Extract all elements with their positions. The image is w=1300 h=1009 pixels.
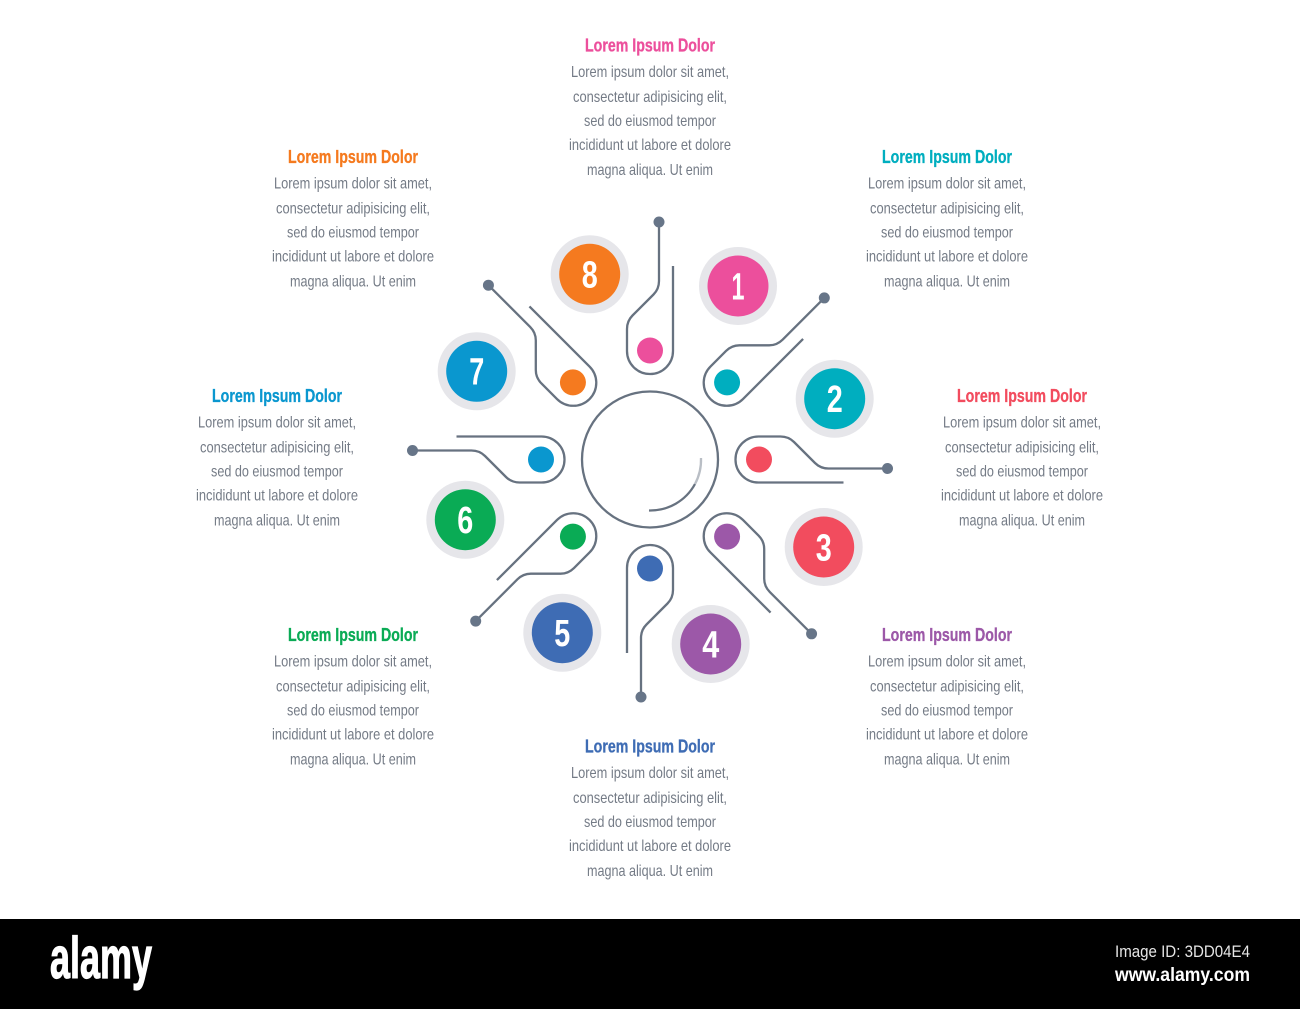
text block 8: orange, upper left: Lorem ipsum dolor sit amet, bbox=[274, 176, 432, 192]
text block 5: blue, bottom: magna aliqua. Ut enim bbox=[587, 863, 713, 880]
text block 8: orange, upper left: magna aliqua. Ut enim bbox=[290, 274, 416, 290]
text block 3: red, right: sed do eiusmod tempor bbox=[956, 464, 1089, 480]
text block 6: green, lower left: magna aliqua. Ut enim bbox=[290, 752, 416, 768]
text block 4: purple, lower right: Lorem Ipsum Dolor bbox=[882, 625, 1012, 645]
number badge 5: 5 bbox=[554, 613, 570, 655]
number badge 8: 8 bbox=[582, 254, 598, 296]
text block 3: red, right bbox=[941, 386, 1103, 530]
text block 1: pink, top: incididunt ut labore et dolore bbox=[569, 137, 731, 154]
image id: Image ID: 3DD04E4 bbox=[1115, 942, 1250, 961]
text block 1: pink, top bbox=[569, 36, 731, 179]
text block 5: blue, bottom: incididunt ut labore et dolore bbox=[569, 838, 731, 855]
number badge 4 bbox=[672, 605, 750, 683]
number badge 4: 4 bbox=[702, 624, 719, 666]
text block 2: teal, upper right: magna aliqua. Ut enim bbox=[884, 274, 1010, 290]
connector 5: blue bbox=[627, 545, 673, 702]
text block 1: pink, top: consectetur adipisicing elit, bbox=[573, 89, 727, 106]
text block 3: red, right: incididunt ut labore et dolore bbox=[941, 488, 1103, 504]
text block 6: green, lower left: Lorem Ipsum Dolor bbox=[288, 625, 418, 645]
text block 7: light blue, left: magna aliqua. Ut enim bbox=[214, 512, 340, 530]
number badge 2 bbox=[796, 360, 874, 438]
text block 1: pink, top: Lorem Ipsum Dolor bbox=[585, 36, 715, 56]
connector 6: green bbox=[462, 504, 606, 648]
text block 3: red, right: Lorem ipsum dolor sit amet, bbox=[943, 414, 1101, 432]
text block 3: red, right: Lorem Ipsum Dolor bbox=[957, 386, 1087, 406]
number badge 7 bbox=[438, 332, 516, 410]
text block 3: red, right: consectetur adipisicing elit, bbox=[945, 440, 1099, 456]
text block 2: teal, upper right: Lorem Ipsum Dolor bbox=[882, 147, 1012, 167]
text block 5: blue, bottom: consectetur adipisicing elit, bbox=[573, 790, 727, 807]
text block 2: teal, upper right bbox=[866, 147, 1028, 290]
text block 7: light blue, left bbox=[196, 386, 358, 530]
text block 6: green, lower left: Lorem ipsum dolor sit amet, bbox=[274, 654, 432, 670]
text block 7: light blue, left: incididunt ut labore et dolore bbox=[196, 488, 358, 504]
text block 8: orange, upper left bbox=[272, 147, 434, 290]
number badge 6 bbox=[426, 481, 504, 559]
text block 6: green, lower left: consectetur adipisicing elit, bbox=[276, 678, 430, 696]
number badge 7: 7 bbox=[469, 352, 484, 394]
text block 2: teal, upper right: consectetur adipisicing elit, bbox=[870, 200, 1024, 218]
text block 8: orange, upper left: consectetur adipisicing elit, bbox=[276, 200, 430, 218]
text block 6: green, lower left: incididunt ut labore et dolore bbox=[272, 726, 434, 744]
text block 4: purple, lower right bbox=[866, 625, 1028, 768]
number badge 1: 1 bbox=[732, 266, 744, 308]
text block 4: purple, lower right: magna aliqua. Ut enim bbox=[884, 752, 1010, 768]
text block 7: light blue, left: sed do eiusmod tempor bbox=[211, 464, 344, 480]
text block 4: purple, lower right: sed do eiusmod tempor bbox=[881, 702, 1014, 720]
text block 4: purple, lower right: Lorem ipsum dolor sit amet, bbox=[868, 654, 1026, 670]
text block 8: orange, upper left: sed do eiusmod tempor bbox=[287, 224, 420, 242]
website: www.alamy.com bbox=[1114, 965, 1250, 986]
text block 3: red, right: magna aliqua. Ut enim bbox=[959, 512, 1085, 530]
number badge 3: 3 bbox=[816, 528, 832, 570]
connector 4: purple bbox=[694, 504, 838, 648]
alamy logo: alamy bbox=[50, 926, 152, 991]
connector 7: light blue bbox=[407, 436, 564, 482]
number badge 1 bbox=[699, 247, 777, 325]
connector 8: orange bbox=[462, 271, 606, 415]
text block 7: light blue, left: Lorem ipsum dolor sit amet, bbox=[198, 414, 356, 432]
text block 5: blue, bottom: sed do eiusmod tempor bbox=[584, 814, 717, 831]
central circle bbox=[582, 392, 718, 528]
text block 1: pink, top: Lorem ipsum dolor sit amet, bbox=[571, 64, 729, 81]
text block 1: pink, top: sed do eiusmod tempor bbox=[584, 113, 717, 130]
connector 2: teal bbox=[694, 271, 838, 415]
text block 4: purple, lower right: consectetur adipisicing elit, bbox=[870, 678, 1024, 696]
text block 5: blue, bottom: Lorem ipsum dolor sit amet, bbox=[571, 765, 729, 782]
number badge 3 bbox=[785, 508, 863, 586]
text block 6: green, lower left: sed do eiusmod tempor bbox=[287, 702, 420, 720]
text block 6: green, lower left bbox=[272, 625, 434, 768]
text block 1: pink, top: magna aliqua. Ut enim bbox=[587, 162, 713, 179]
text block 7: light blue, left: consectetur adipisicing elit, bbox=[200, 440, 354, 456]
text block 7: light blue, left: Lorem Ipsum Dolor bbox=[212, 386, 342, 406]
footer band bbox=[0, 919, 1300, 1009]
number badge 2: 2 bbox=[827, 379, 843, 421]
number badge 5 bbox=[523, 594, 601, 672]
number badge 6: 6 bbox=[457, 500, 473, 542]
text block 2: teal, upper right: incididunt ut labore et dolore bbox=[866, 248, 1028, 266]
connector 3: red bbox=[736, 436, 893, 482]
text block 2: teal, upper right: sed do eiusmod tempor bbox=[881, 224, 1014, 242]
number badge 8 bbox=[551, 235, 629, 313]
text block 4: purple, lower right: incididunt ut labore et dolore bbox=[866, 726, 1028, 744]
text block 5: blue, bottom bbox=[569, 736, 731, 880]
connector 1: pink bbox=[627, 216, 673, 374]
text block 8: orange, upper left: incididunt ut labore et dolore bbox=[272, 248, 434, 266]
text block 5: blue, bottom: Lorem Ipsum Dolor bbox=[585, 736, 715, 756]
text block 2: teal, upper right: Lorem ipsum dolor sit amet, bbox=[868, 176, 1026, 192]
text block 8: orange, upper left: Lorem Ipsum Dolor bbox=[288, 147, 418, 167]
